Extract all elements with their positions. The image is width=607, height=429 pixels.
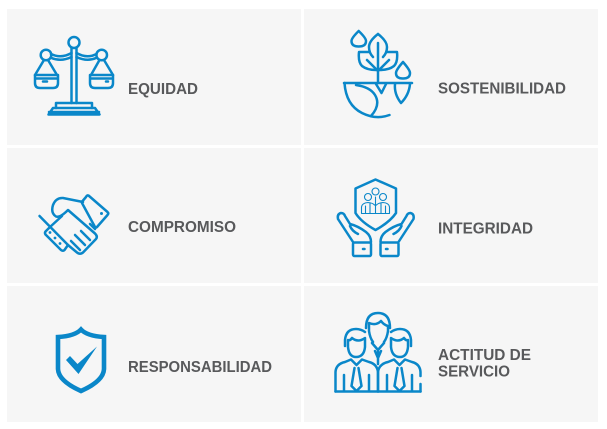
panel: equidad (7, 9, 301, 145)
icon: plant with drops (344, 31, 412, 117)
label: actitud de servicio: ACTITUD DE (438, 347, 531, 364)
icon: handshake (40, 195, 108, 254)
label: actitud de servicio (438, 347, 531, 380)
panel: sostenibilidad (304, 9, 598, 145)
panel: compromiso (7, 148, 301, 283)
panel: integridad (304, 148, 598, 283)
label: integridad: INTEGRIDAD (438, 220, 533, 238)
label: compromiso: COMPROMISO (128, 219, 236, 236)
panel: actitud de servicio (304, 286, 598, 422)
icon: shield with check (58, 330, 104, 391)
label: responsabilidad: RESPONSABILIDAD (128, 359, 272, 376)
icon: three business people (336, 313, 420, 392)
icon: balance scale (35, 37, 113, 114)
label: sostenibilidad: SOSTENIBILIDAD (438, 80, 566, 98)
label: actitud de servicio: SERVICIO (438, 364, 510, 380)
icon: hands holding shield with people (338, 180, 414, 256)
label: equidad: EQUIDAD (128, 81, 198, 98)
panel: responsabilidad (7, 286, 301, 422)
